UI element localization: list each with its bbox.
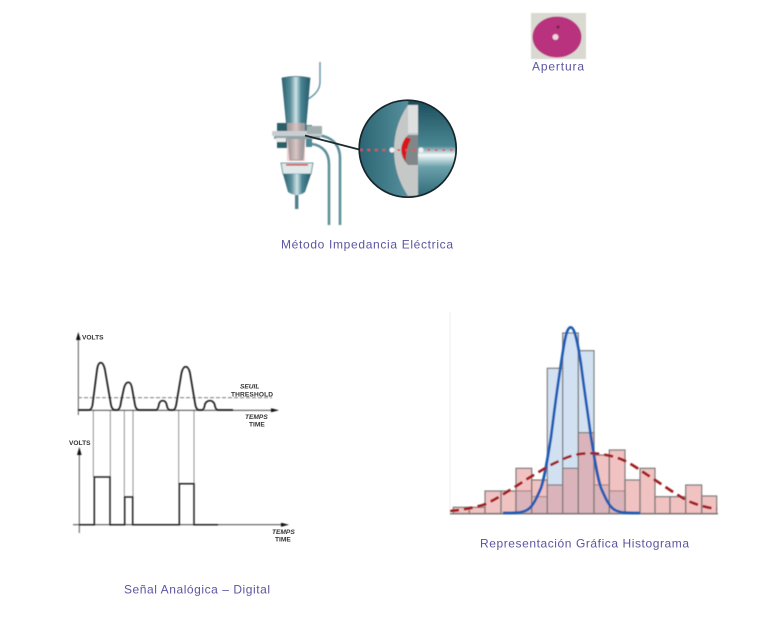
red electrolyte line — [286, 164, 308, 166]
analog y arrow — [76, 332, 81, 340]
electrode right — [418, 147, 424, 153]
digital axes — [73, 452, 284, 533]
red aperture crescent — [402, 137, 411, 162]
mount plate left — [277, 123, 287, 148]
magnified view of aperture — [358, 99, 458, 199]
tube: outlet right — [318, 135, 340, 225]
label: THRESHOLD: THRESHOLD — [231, 392, 273, 398]
fluid right with beam — [408, 99, 458, 199]
label: TIME bottom: TIME — [275, 536, 291, 544]
guide lines — [93, 410, 194, 497]
fluid left — [358, 99, 408, 199]
wide red dashed distribution curve — [450, 453, 717, 511]
label: TEMPS top: TEMPS — [245, 414, 268, 421]
small mark — [556, 26, 560, 28]
digital y arrow — [77, 447, 82, 455]
y axis — [449, 312, 451, 513]
infographic canvas — [69, 12, 719, 596]
plate highlight — [408, 105, 418, 133]
digital x arrow — [281, 523, 289, 527]
lower cup body — [283, 174, 311, 195]
threshold line — [78, 397, 272, 399]
caption: Apertura: Apertura — [532, 60, 584, 74]
funnel — [282, 76, 310, 160]
label: TIME top: TIME — [249, 422, 265, 428]
icon: magenta disc — [532, 16, 582, 58]
lens border — [359, 100, 456, 197]
plate inner shadow — [401, 135, 418, 165]
label: SEUIL: SEUIL — [240, 384, 259, 390]
caption: Señal Analógica – Digital: Señal Analógica – Digital — [124, 582, 270, 596]
sheath wire — [308, 62, 320, 99]
digital signal — [79, 477, 218, 525]
baseline — [450, 513, 718, 515]
diagram: electrical impedance apparatus — [272, 62, 340, 225]
clamp bars — [272, 131, 322, 136]
pink sensing zone — [287, 123, 305, 161]
label: TEMPS bottom: TEMPS — [272, 529, 295, 536]
chart: histogram — [450, 312, 718, 514]
pointer line to magnified view — [305, 136, 361, 150]
caption: Método Impedancia Eléctrica: Método Impedancia Eléctrica — [281, 238, 453, 252]
label: VOLTS bottom: VOLTS — [69, 440, 91, 447]
drain tube — [295, 195, 298, 209]
lower cup rim — [281, 163, 313, 174]
analog x arrow — [271, 408, 279, 412]
caption: Representación Gráfica Histograma: Representación Gráfica Histograma — [480, 536, 689, 550]
photo: aperture disc — [531, 13, 586, 59]
pink bars — [453, 433, 717, 514]
chart: analog and digital signal — [73, 332, 289, 533]
label: VOLTS top: VOLTS — [82, 334, 104, 342]
blue bars — [516, 333, 625, 514]
analog axes — [78, 337, 274, 415]
aperture hole — [552, 34, 558, 40]
narrow blue distribution curve — [503, 327, 640, 513]
mount plate right — [306, 125, 312, 147]
grey plate — [394, 105, 418, 196]
analog signal — [78, 363, 233, 410]
tube: outlet left — [312, 144, 329, 225]
particle stream — [360, 149, 456, 151]
electrode left — [389, 147, 395, 153]
